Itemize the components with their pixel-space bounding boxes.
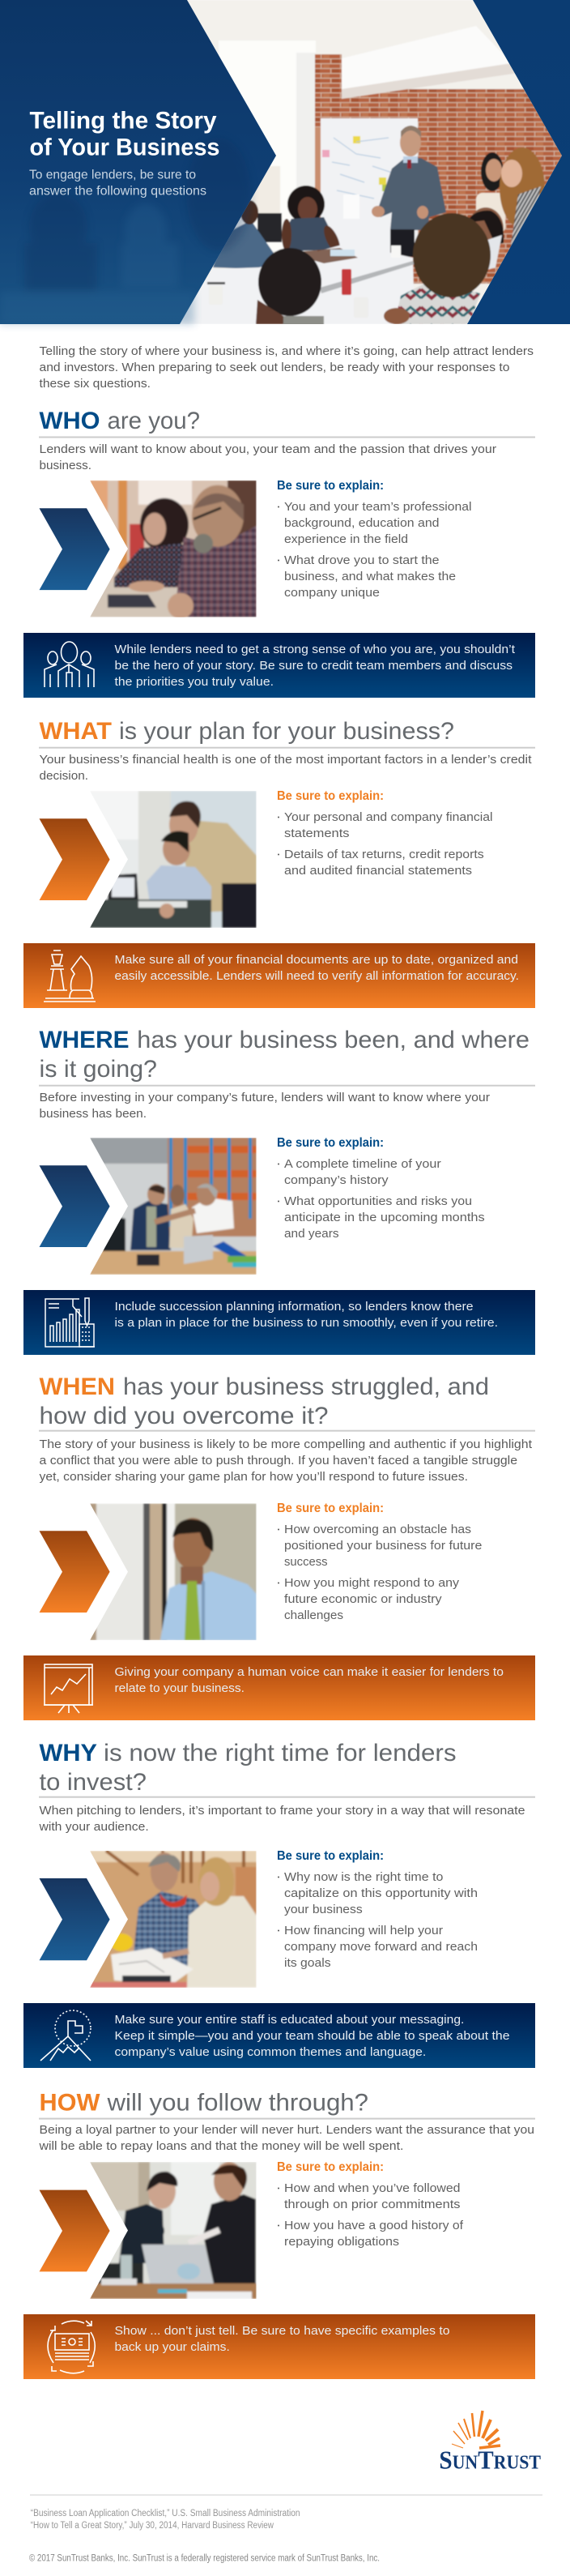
heading: WHAT is your plan: is your plan for your business? <box>119 718 454 745</box>
be sure list: Be sure to explain: <box>277 1136 384 1150</box>
be sure list <box>277 789 492 878</box>
body text: Your business’s financial health is one of the most important factors in a lender’s credit <box>39 753 532 767</box>
hero right chevron panel <box>467 0 570 324</box>
body text <box>38 1804 525 1834</box>
be sure list: success <box>284 1555 328 1569</box>
be sure list: statements <box>284 827 350 840</box>
icon: banknote with circular arrows <box>48 2321 95 2373</box>
SunTrust logo <box>439 2411 541 2475</box>
heading: WHY is now the right time <box>39 1740 457 1796</box>
callout band: be the hero of your story. Be sure to credit team members and discuss <box>115 659 513 673</box>
chevron arrow <box>39 2190 110 2271</box>
be sure list: company unique <box>284 586 380 600</box>
callout band <box>23 1655 535 1720</box>
callout band <box>23 1290 535 1355</box>
icon: financial report and calculator <box>45 1298 95 1347</box>
body text <box>39 1091 490 1121</box>
chevron arrow <box>39 1165 110 1247</box>
photo: man looking out a window <box>90 1503 257 1640</box>
seated woman <box>287 186 325 223</box>
heading: WHO are you?: WHO <box>39 408 100 434</box>
heading: WHY is now the right time: is now the right time for lenders <box>104 1740 457 1766</box>
hero subtitle: answer the following questions <box>29 185 206 198</box>
section: WHEN <box>23 1373 535 1720</box>
presenter <box>377 158 446 230</box>
be sure list: experience in the field <box>284 532 408 546</box>
chevron arrow <box>39 508 110 590</box>
hero photo: team meeting around a table <box>174 0 568 326</box>
logo sunburst <box>452 2411 500 2448</box>
be sure list: its goals <box>284 1956 331 1970</box>
body text: Lenders will want to know about you, your team and the passion that drives your <box>39 442 496 456</box>
heading: WHEN has your business struggled: has your business struggled, and <box>123 1373 489 1400</box>
be sure list: What opportunities and risks you <box>284 1194 472 1208</box>
hero banner <box>0 0 570 326</box>
be sure list: Be sure to explain: <box>277 1849 384 1863</box>
body text: business has been. <box>39 1107 147 1121</box>
be sure list: How financing will help your <box>284 1924 443 1937</box>
heading: WHEN has your business struggled: how did you overcome it? <box>39 1403 329 1429</box>
be sure list: Be sure to explain: <box>277 2160 384 2174</box>
body text: a conflict that you were able to push through. If you haven’t faced a tangible struggle <box>39 1454 517 1467</box>
photo: warehouse team <box>90 1138 257 1275</box>
body text: When pitching to lenders, it’s important to frame your story in a way that will resonate <box>39 1804 525 1818</box>
table <box>236 245 415 320</box>
body text: Being a loyal partner to your lender will never hurt. Lenders want the assurance that you <box>39 2123 534 2137</box>
callout band: Keep it simple—you and your team should be able to speak about the <box>115 2029 510 2043</box>
hero left chevron panel <box>0 0 276 324</box>
callout band: is a plan in place for the business to run smoothly, even if you retire. <box>115 1316 498 1330</box>
hero title: Telling the Story <box>29 107 217 135</box>
body text <box>39 753 532 783</box>
be sure list: Your personal and company financial <box>284 810 492 824</box>
whiteboard <box>321 118 418 254</box>
be sure list: future economic or industry <box>284 1592 442 1606</box>
copyright line: © 2017 SunTrust Banks, Inc. SunTrust is a federally registered service mark of SunTrust Banks, Inc. <box>29 2554 380 2564</box>
heading: WHEN has your business struggled <box>39 1373 489 1429</box>
section: HOW <box>23 2089 535 2379</box>
be sure list <box>277 479 471 600</box>
hero subtitle: To engage lenders, be sure to <box>29 169 196 182</box>
callout band: While lenders need to get a strong sense of who you are, you shouldn’t <box>115 643 516 656</box>
photo: two colleagues at a laptop <box>90 2162 257 2299</box>
heading: WHEN has your business struggled: WHEN <box>39 1373 115 1400</box>
intro paragraph: Telling the story of where your business is, and where it’s going, can help attract lenders <box>39 344 534 358</box>
logo wordmark: SUNTRUST <box>439 2446 541 2475</box>
be sure list: through on prior commitments <box>284 2198 460 2211</box>
be sure list: Be sure to explain: <box>277 479 384 493</box>
intro paragraph: these six questions. <box>39 377 151 391</box>
chevron arrow <box>39 1531 110 1613</box>
heading: WHY is now the right time: to invest? <box>39 1769 147 1796</box>
body text <box>38 2123 534 2153</box>
body text: yet, consider sharing your game plan for how you’ll respond to future issues. <box>39 1470 468 1484</box>
two women <box>476 193 505 233</box>
body text: will be able to repay loans and that the money will be well spent. <box>38 2139 403 2153</box>
callout band: Make sure all of your financial documents are up to date, organized and <box>115 953 518 967</box>
heading: WHO are you? <box>39 408 200 434</box>
foreground man <box>258 248 321 316</box>
callout band: back up your claims. <box>115 2340 230 2354</box>
photo: woman and man at laptop <box>90 481 257 619</box>
callout band <box>23 633 535 698</box>
be sure list: background, education and <box>284 516 439 530</box>
right man <box>472 207 504 240</box>
callout band: easily accessible. Lenders will need to verify all information for accuracy. <box>115 969 519 983</box>
icon: chess king and knight <box>44 951 96 1002</box>
section: WHY <box>23 1740 535 2068</box>
be sure list: You and your team’s professional <box>284 500 471 514</box>
dreadlocks person <box>394 281 480 324</box>
be sure list: company move forward and reach <box>284 1940 478 1954</box>
heading: WHO are you?: are you? <box>107 408 200 434</box>
be sure list: your business <box>284 1903 363 1916</box>
section: WHERE <box>23 1027 535 1355</box>
footnotes <box>31 2509 300 2531</box>
be sure list: repaying obligations <box>284 2235 399 2249</box>
body text: business. <box>39 459 91 472</box>
heading: WHERE has your business been: has your business been, and where <box>137 1027 530 1053</box>
heading: WHERE has your business been: WHERE <box>39 1027 130 1053</box>
body text: The story of your business is likely to be more compelling and authentic if you highlight <box>39 1438 533 1451</box>
icon: team of three people <box>45 642 94 687</box>
chevron arrow <box>39 1878 110 1960</box>
callout band: the priorities you truly value. <box>115 675 274 689</box>
be sure list: How you might respond to any <box>284 1576 460 1590</box>
standing woman behind chevron <box>253 166 280 216</box>
be sure list: and audited financial statements <box>284 864 472 878</box>
body text: decision. <box>39 769 88 783</box>
section: WHO <box>23 408 535 698</box>
be sure list: anticipate in the upcoming months <box>284 1211 485 1224</box>
be sure list: How you have a good history of <box>284 2219 464 2232</box>
section: WHAT <box>23 718 535 1008</box>
callout band: Giving your company a human voice can make it easier for lenders to <box>115 1665 504 1679</box>
heading: HOW will you follow through?: will you follow through? <box>106 2089 368 2116</box>
be sure list <box>277 2160 464 2249</box>
callout band: Make sure your entire staff is educated about your messaging. <box>115 2013 464 2027</box>
body text <box>39 1438 533 1484</box>
icon: flag on a mountain inside dotted circle <box>40 2010 91 2061</box>
icon: presentation board with rising line chart <box>44 1664 93 1713</box>
be sure list: challenges <box>284 1608 343 1622</box>
heading: WHERE has your business been <box>39 1027 530 1083</box>
be sure list: Details of tax returns, credit reports <box>284 848 484 861</box>
photo: contractors reviewing plans <box>90 1851 257 1988</box>
callout band <box>23 943 535 1008</box>
chevron arrow <box>39 818 110 900</box>
callout band <box>23 2314 535 2379</box>
hero title line 2: of Your Business <box>29 135 220 160</box>
be sure list: Why now is the right time to <box>284 1870 443 1884</box>
be sure list: company’s history <box>284 1173 389 1187</box>
be sure list: business, and what makes the <box>284 570 456 583</box>
heading: WHY is now the right time: WHY <box>39 1740 97 1766</box>
be sure list: Be sure to explain: <box>277 1502 384 1515</box>
intro paragraph <box>39 344 534 391</box>
man in denim <box>213 220 277 269</box>
intro paragraph: and investors. When preparing to seek out lenders, be ready with your responses to <box>39 361 510 374</box>
footnotes: “How to Tell a Great Story,” July 30, 2014, Harvard Business Review <box>31 2521 274 2531</box>
body text: with your audience. <box>38 1820 149 1834</box>
be sure list <box>277 1502 482 1622</box>
body text <box>39 442 496 472</box>
be sure list: Be sure to explain: <box>277 789 384 803</box>
footnotes: “Business Loan Application Checklist,” U.S. Small Business Administration <box>31 2509 300 2518</box>
be sure list: positioned your business for future <box>284 1539 482 1553</box>
body text: Before investing in your company’s future, lenders will want to know where your <box>39 1091 490 1104</box>
heading: WHERE has your business been: is it going? <box>39 1056 157 1083</box>
be sure list: A complete timeline of your <box>284 1157 441 1171</box>
callout band: Show ... don’t just tell. Be sure to have specific examples to <box>115 2324 450 2338</box>
heading: HOW will you follow through?: HOW <box>39 2089 100 2116</box>
be sure list: How and when you’ve followed <box>284 2181 460 2195</box>
be sure list <box>277 1849 478 1970</box>
callout band: company’s value using common themes and language. <box>115 2045 426 2059</box>
be sure list: How overcoming an obstacle has <box>284 1523 471 1536</box>
callout band: Include succession planning information, so lenders know there <box>115 1300 473 1314</box>
heading: WHAT is your plan: WHAT <box>39 718 112 745</box>
callout band: relate to your business. <box>115 1681 245 1695</box>
be sure list: What drove you to start the <box>284 553 439 567</box>
callout band <box>23 2003 535 2068</box>
hero subtitle <box>29 169 206 198</box>
be sure list: and years <box>284 1227 338 1241</box>
photo: two men at a tablet <box>90 791 257 928</box>
be sure list <box>277 1136 485 1241</box>
be sure list: capitalize on this opportunity with <box>284 1886 478 1900</box>
